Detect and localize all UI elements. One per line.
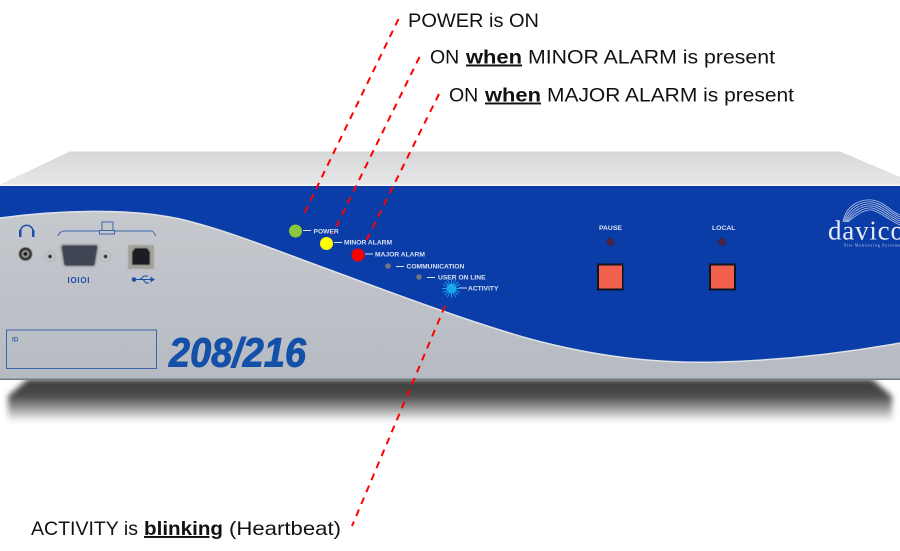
callout line: major alarm xyxy=(365,94,439,243)
callout line: activity xyxy=(352,306,445,526)
local control xyxy=(709,225,736,290)
callout: activity blinking: (Heartbeat) xyxy=(229,518,341,540)
icon: usb xyxy=(132,276,154,283)
minor alarm label: MINOR ALARM xyxy=(344,240,392,246)
local button xyxy=(709,264,736,290)
bottom edge xyxy=(0,378,900,380)
davicom logo xyxy=(828,200,900,248)
pause control xyxy=(597,225,624,290)
activity label: ACTIVITY xyxy=(468,286,499,292)
callout: major alarm: ON xyxy=(449,84,478,106)
serial label: IOIOI xyxy=(68,276,90,285)
activity led blinking xyxy=(442,279,461,298)
power led xyxy=(289,224,302,238)
id label: ID xyxy=(12,336,19,344)
minor alarm led xyxy=(320,237,333,250)
user on line label: USER ON LINE xyxy=(438,274,486,282)
callout: major alarm: when xyxy=(484,84,541,106)
serial port connector xyxy=(45,244,110,267)
callout: major alarm xyxy=(449,84,795,106)
callout: major alarm: MAJOR ALARM is present xyxy=(547,84,795,106)
callout: activity blinking: ACTIVITY is xyxy=(31,518,138,540)
callout: minor alarm: when xyxy=(465,46,522,68)
pause button xyxy=(597,264,624,290)
panel curve highlight xyxy=(0,211,900,362)
front panel blue area xyxy=(0,186,900,362)
callout: activity blinking xyxy=(31,518,341,540)
logo tagline: Site Monitoring Systems xyxy=(844,242,900,248)
icon: audio jack xyxy=(19,248,32,260)
device top cover xyxy=(0,152,900,185)
power label: POWER xyxy=(314,228,339,236)
id box xyxy=(6,330,156,368)
callout line: power xyxy=(302,19,398,218)
icon: laptop bracket xyxy=(58,222,156,236)
device shadow xyxy=(8,379,892,422)
icon: headphones xyxy=(19,225,34,237)
local indicator xyxy=(718,238,726,246)
callout: power is on: POWER is ON xyxy=(408,10,539,32)
device unit xyxy=(0,152,900,422)
communication label: COMMUNICATION xyxy=(406,264,464,270)
top edge highlight xyxy=(0,184,900,186)
communication led xyxy=(385,263,391,269)
pause indicator xyxy=(606,238,615,246)
local label: LOCAL xyxy=(712,225,735,232)
user on line led xyxy=(416,274,422,280)
usb port xyxy=(128,245,154,269)
pause label: PAUSE xyxy=(599,225,622,232)
callout: activity blinking: blinking xyxy=(144,518,223,540)
callout: minor alarm: ON xyxy=(430,46,459,68)
front panel grey base xyxy=(0,186,900,379)
major alarm led xyxy=(352,248,364,262)
major alarm label: MAJOR ALARM xyxy=(375,252,425,258)
callout line: minor alarm xyxy=(333,57,420,233)
model number: 208/216 xyxy=(168,330,307,376)
callout: minor alarm: MINOR ALARM is present xyxy=(528,46,776,68)
callout: minor alarm xyxy=(430,46,776,68)
led indicator labels xyxy=(303,228,499,292)
logo wave xyxy=(843,200,900,225)
